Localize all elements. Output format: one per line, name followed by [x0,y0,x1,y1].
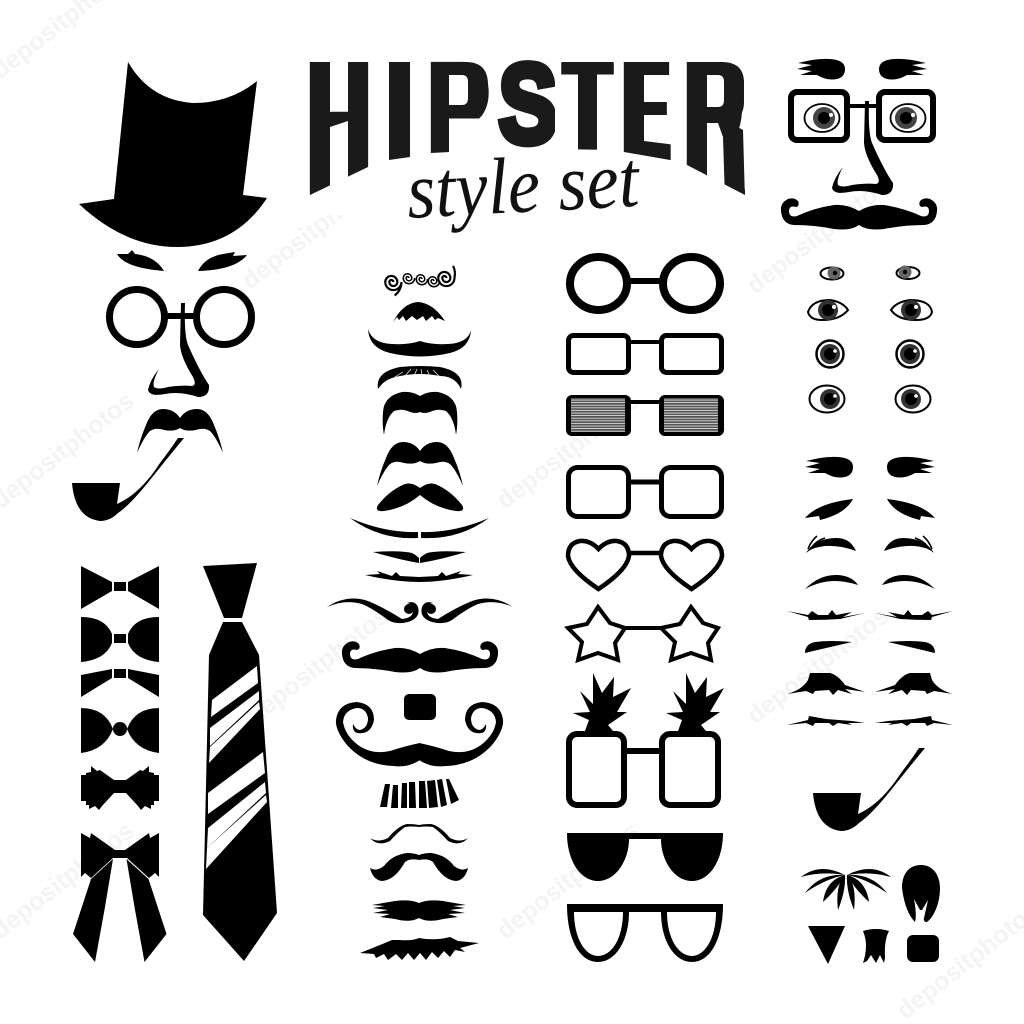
mustache 15 wave [370,853,468,881]
mustache 11 handlebar [342,641,498,672]
title: HIPSTER arched lettering: T [562,39,613,173]
top hat [79,62,267,247]
mustache 5 walrus [377,442,463,486]
subtitle: style set: style set [405,136,642,236]
mustache 2 smile [368,329,471,356]
mustache 14 thin wave [370,824,468,843]
mustache 12 big curl [336,702,503,766]
mustache 9 spiked pencil [365,571,473,582]
nose [148,303,209,397]
eyebrow pair 2 [805,499,935,520]
title: HIPSTER arched lettering: I [385,38,414,187]
mustache 7 thin wing [350,518,489,538]
round eye left [816,340,844,368]
figure: hipster face with top hat [72,62,267,521]
eyebrow pair 8 [787,716,953,726]
title: HIPSTER arched lettering: R [684,29,744,232]
smoking pipe [72,438,184,521]
round glasses [570,257,720,310]
bow tie 3 [81,669,159,697]
round eye right [896,340,924,368]
bow tie 1 [81,566,159,609]
soul patch square [404,694,436,720]
beard: rounded square [907,935,939,962]
large rounded glasses [568,468,722,516]
bow tie 2 [81,617,159,662]
mustache 3 bristled [378,366,462,389]
eyebrow pair 5 [787,610,953,620]
watermarks: depositphotos [491,387,644,515]
eyebrow pair 7 [787,673,953,695]
nose [832,101,893,195]
star glasses [568,607,718,660]
right eye [890,104,926,132]
mustache 10 curled thin [327,599,513,623]
eyebrows [797,59,927,80]
watermarks: depositphotos [741,602,894,730]
small eye left [820,266,844,280]
eyebrow pair 3 [806,536,934,553]
bow tie 5 [81,766,159,810]
eyebrows [117,250,247,271]
column: bow ties [73,566,166,962]
rectangular glasses [568,336,722,372]
round glasses [110,290,252,344]
mustache 4 drooping [383,392,457,435]
almond eye right [891,300,932,320]
mustache 8 pencil [373,551,466,563]
spiral curls [385,266,455,296]
eyebrow pair 6 [805,641,935,653]
hair piece: egg tuft [902,865,940,922]
left eye [804,104,840,132]
beard bars [380,779,459,808]
column: mustaches [327,266,513,960]
half-moon sunglasses [567,833,723,881]
heart glasses [568,541,722,589]
column: eyebrows [787,457,953,726]
necktie with stripes [203,563,277,961]
beard: goatee [863,929,889,963]
icon: pipe [813,748,925,831]
half-moon outline glasses [567,904,723,962]
column: glasses [566,257,724,962]
column: eyes [808,266,932,412]
watermarks: depositphotos [491,817,644,945]
watermarks: depositphotos [741,172,894,300]
title: HIPSTER arched lettering [296,29,755,232]
wide eye left [810,386,844,412]
watermarks: depositphotos [241,602,394,730]
almond eye left [808,300,848,320]
mustache 16 feathered [372,900,466,921]
hair piece: palm tuft [801,869,891,910]
bow tie 6 with ribbons [73,833,166,962]
mustache [137,409,223,453]
mustache 17 shaggy [360,937,479,960]
title: HIPSTER arched lettering: E [621,37,672,188]
eyebrow pair 1 [805,457,935,478]
beard: triangle [808,926,845,964]
eyebrow pair 4 [805,575,935,589]
square glasses [791,92,933,140]
wide eye right [896,386,930,412]
watermarks: depositphotos [236,167,389,295]
curled mustache [781,198,937,230]
shutter glasses [566,395,724,436]
pineapple glasses [569,673,724,805]
title: HIPSTER arched lettering: P [427,37,490,179]
bow tie 4 [81,708,159,753]
figure: glasses face top right [781,59,937,230]
title: HIPSTER arched lettering: S [499,42,557,167]
small eye right [896,266,920,279]
mustache 1 toothed [393,302,445,322]
mustache 6 chevron [377,484,463,511]
title: HIPSTER arched lettering: H [306,29,371,232]
